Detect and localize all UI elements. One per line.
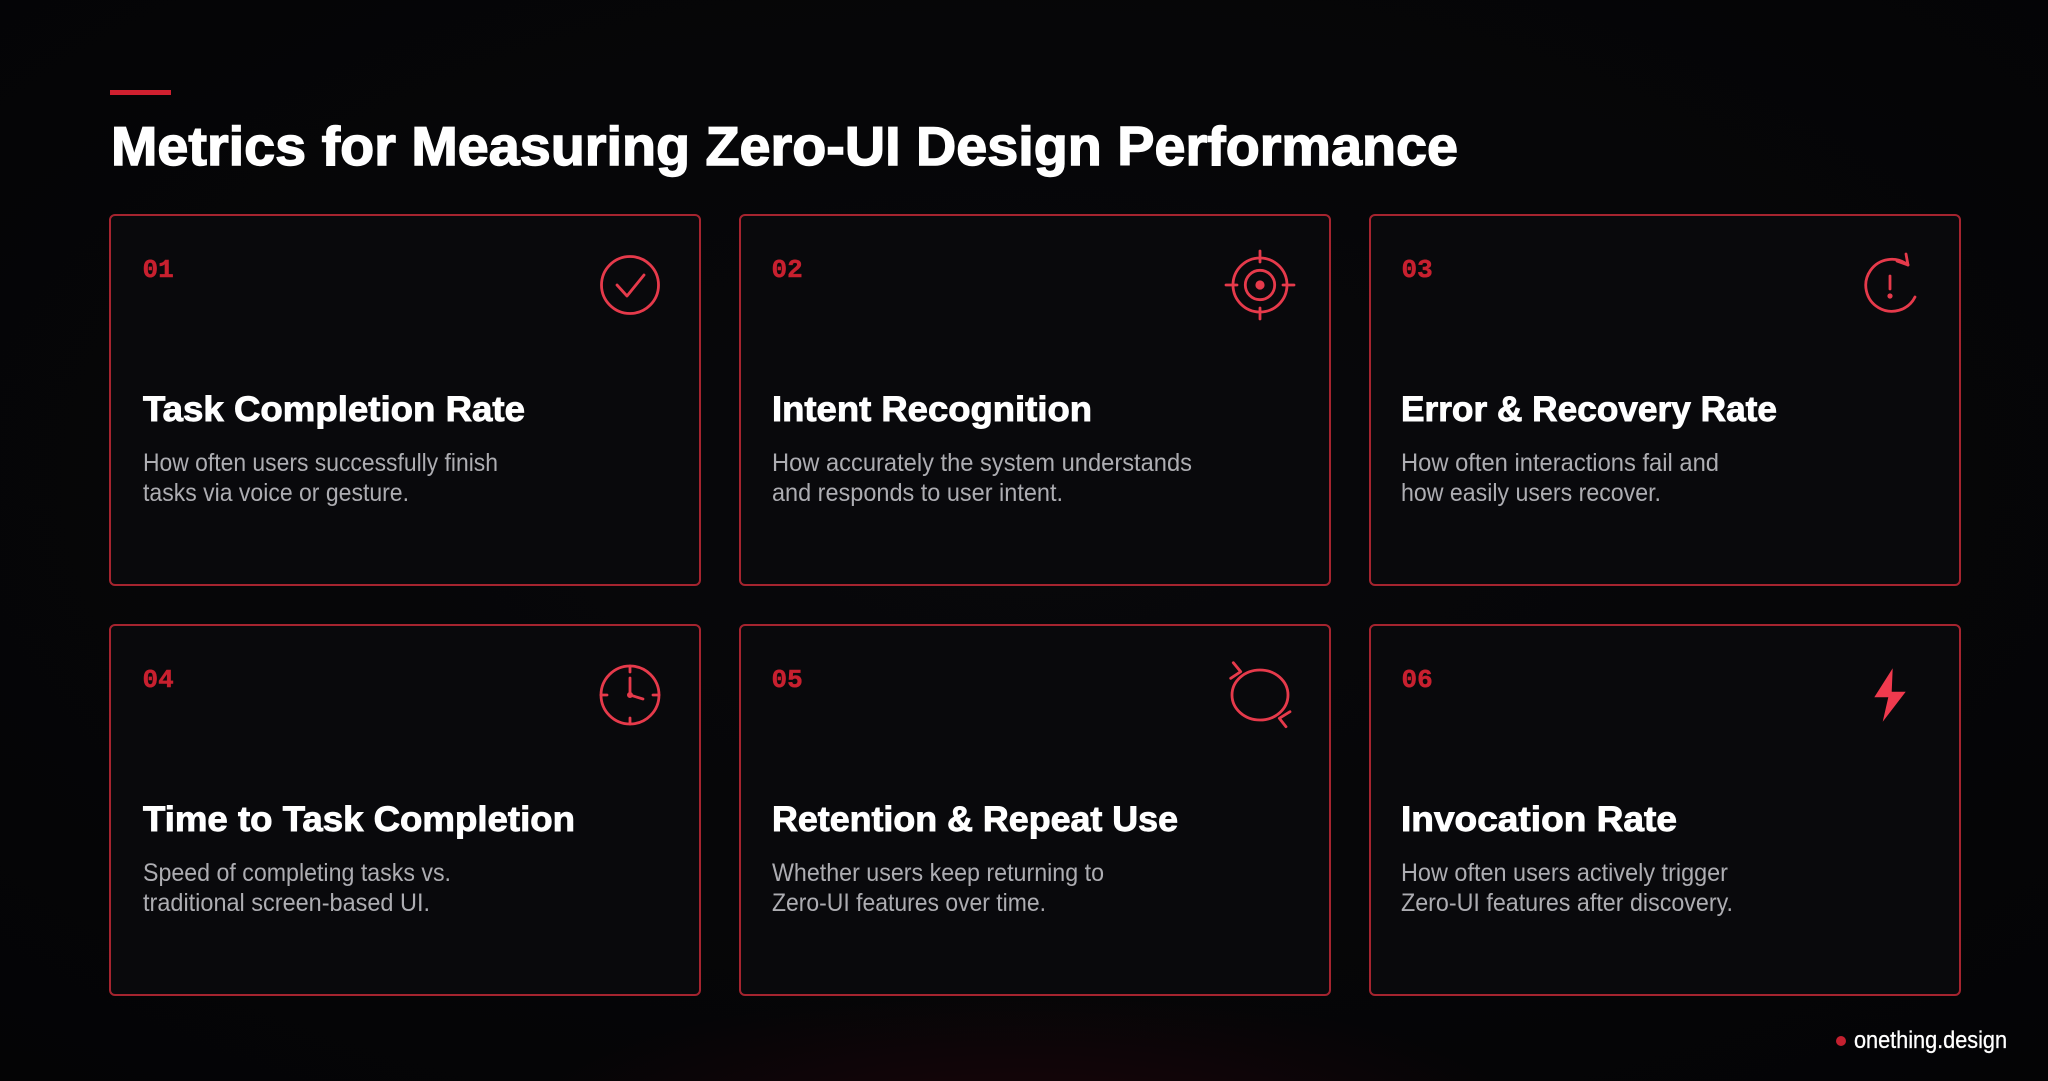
- heading: Task Completion Rate: [143, 390, 525, 429]
- description: How often users actively trigger: [1401, 859, 1728, 887]
- description: and responds to user intent.: [772, 479, 1063, 507]
- number 03: 03: [1402, 255, 1433, 285]
- number 04: 04: [142, 665, 174, 695]
- number 01: 01: [142, 255, 174, 285]
- description: traditional screen-based UI.: [143, 889, 430, 917]
- heading: Time to Task Completion: [143, 800, 575, 839]
- number 05: 05: [772, 665, 803, 695]
- panel: invocation rate: [1370, 625, 1960, 995]
- description: [772, 449, 1192, 507]
- panel: retention and repeat use: [740, 625, 1330, 995]
- number 06: 06: [1402, 665, 1433, 695]
- icon: repeat loop: [1231, 663, 1290, 727]
- accent bar: [110, 90, 171, 95]
- panel: error and recovery rate: [1370, 215, 1960, 585]
- icon: check circle: [602, 256, 658, 314]
- description: [1401, 859, 1733, 917]
- icon: clock: [601, 666, 659, 724]
- heading: Intent Recognition: [772, 390, 1092, 429]
- description: Speed of completing tasks vs.: [143, 859, 451, 887]
- brand logo: onething.design: [1854, 1027, 2007, 1054]
- description: [1401, 449, 1719, 507]
- icon: target: [1226, 251, 1294, 319]
- icon: lightning bolt: [1874, 668, 1906, 722]
- description: How accurately the system understands: [772, 449, 1192, 477]
- description: tasks via voice or gesture.: [143, 479, 409, 507]
- heading: Invocation Rate: [1401, 800, 1677, 839]
- description: [772, 859, 1104, 917]
- description: Whether users keep returning to: [772, 859, 1104, 887]
- description: Zero-UI features over time.: [772, 889, 1046, 917]
- panel: task completion rate: [110, 215, 700, 585]
- description: how easily users recover.: [1401, 479, 1661, 507]
- number 02: 02: [772, 255, 803, 285]
- panel: intent recognition: [740, 215, 1330, 585]
- description: [143, 449, 498, 507]
- description: How often interactions fail and: [1401, 449, 1719, 477]
- panel: time to task completion: [110, 625, 700, 995]
- heading: Error & Recovery Rate: [1401, 390, 1777, 429]
- title: Metrics for Measuring Zero-UI Design Performance: [111, 115, 1458, 177]
- description: [143, 859, 451, 917]
- description: How often users successfully finish: [143, 449, 498, 477]
- description: Zero-UI features after discovery.: [1401, 889, 1733, 917]
- icon: error recovery: [1866, 254, 1915, 311]
- heading: Retention & Repeat Use: [772, 800, 1178, 839]
